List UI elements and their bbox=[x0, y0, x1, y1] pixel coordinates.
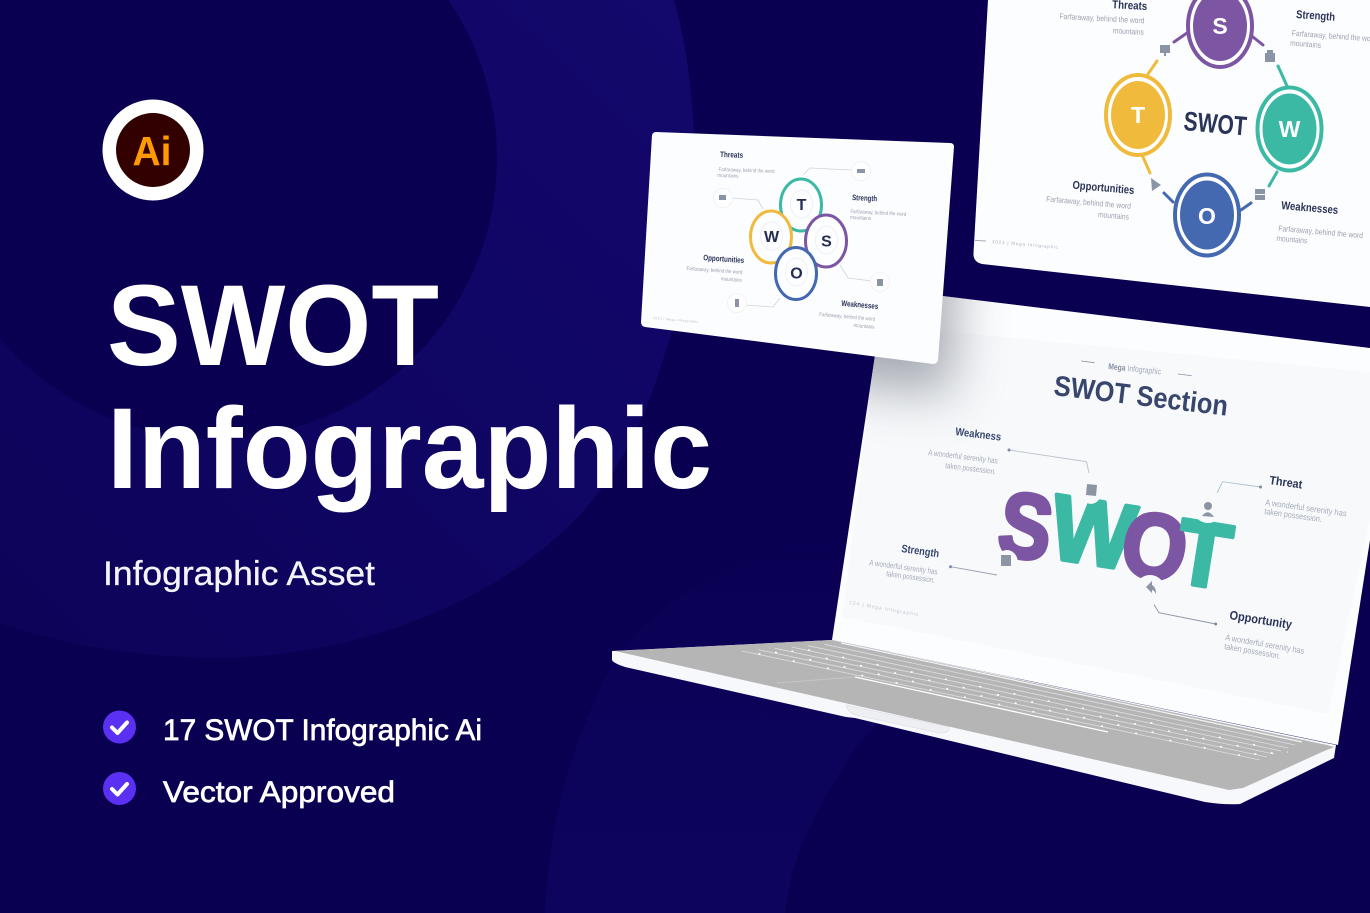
big SWOT letters bbox=[992, 473, 1238, 610]
label: Threats: mountains bbox=[717, 173, 739, 180]
label: Strength bbox=[1290, 9, 1370, 54]
label: Opportunities: mountains bbox=[1098, 210, 1129, 222]
label: Strength bbox=[850, 193, 907, 224]
label: Threat bbox=[1264, 473, 1347, 524]
center label SWOT: SWOT bbox=[1182, 106, 1248, 142]
label: Opportunity: Opportunity bbox=[1229, 608, 1293, 632]
label: Opportunities: mountains bbox=[721, 276, 742, 284]
label: Strength bbox=[869, 543, 940, 585]
icon glyphs bbox=[719, 169, 883, 307]
label: Strength: Strength bbox=[852, 193, 877, 203]
big SWOT letters: T bbox=[1169, 500, 1238, 610]
circle S: S bbox=[1212, 13, 1228, 39]
cycle icons bbox=[1151, 45, 1275, 200]
slide footer: 2023 | Mega Infographic bbox=[653, 316, 699, 324]
label: Weakness: Weakness bbox=[955, 426, 1002, 444]
circle O: O bbox=[790, 266, 803, 282]
circle O bbox=[1175, 174, 1239, 256]
label: Strength: mountains bbox=[850, 215, 871, 222]
feature list bbox=[103, 710, 482, 809]
label: Opportunities: Opportunities bbox=[1072, 180, 1135, 197]
circle S bbox=[806, 215, 846, 267]
big SWOT letters: S bbox=[992, 473, 1059, 582]
label: Threat: Threat bbox=[1269, 473, 1303, 492]
label: Threats: Threats bbox=[720, 150, 744, 160]
circle O: O bbox=[1198, 203, 1216, 229]
label: Threats bbox=[717, 150, 775, 181]
circle W: W bbox=[764, 229, 780, 246]
slide: overlapping SWOT circles bbox=[641, 132, 954, 364]
connectors bbox=[950, 450, 1260, 624]
big SWOT letters: W bbox=[1043, 475, 1142, 590]
label: Weakness: A wonderful serenity has bbox=[928, 448, 998, 466]
title: SWOT bbox=[107, 262, 439, 390]
label: Weaknesses: Weaknesses bbox=[1281, 200, 1339, 217]
label: Weaknesses bbox=[1276, 200, 1365, 250]
letter notches bbox=[996, 476, 1223, 605]
circle T bbox=[780, 179, 822, 231]
slide footer: 2023 | Mega Infographic bbox=[992, 239, 1059, 250]
slide: circular SWOT cycle (top right) bbox=[973, 0, 1370, 307]
label: Opportunity: A wonderful serenity has bbox=[1225, 632, 1305, 656]
label: Weaknesses bbox=[818, 297, 879, 331]
title bbox=[107, 262, 712, 513]
label: Opportunities: Farfaraway, behind the word bbox=[1046, 194, 1131, 211]
label: Threat: taken possession. bbox=[1264, 506, 1323, 524]
label: Weaknesses: mountains bbox=[853, 323, 875, 331]
circle T: T bbox=[1131, 102, 1145, 128]
small slide shadow on screen bbox=[866, 296, 988, 422]
big SWOT letters: O bbox=[1115, 491, 1195, 602]
circle T: T bbox=[797, 197, 807, 214]
laptop base lip bbox=[612, 640, 1336, 804]
circle W bbox=[1258, 88, 1322, 170]
label: Opportunities bbox=[686, 252, 745, 284]
label: Threats: Farfaraway, behind the word bbox=[1059, 12, 1145, 25]
label: Strength: A wonderful serenity has bbox=[869, 558, 938, 577]
screen eyebrow: Mega Infographic bbox=[1108, 361, 1162, 377]
screen footer: 124 | Mega Infographic bbox=[849, 600, 919, 618]
screen eyebrow bbox=[1081, 361, 1192, 377]
label: Weaknesses: mountains bbox=[1276, 234, 1308, 245]
keyboard key dots bbox=[758, 650, 1288, 761]
circle W: W bbox=[1279, 116, 1301, 142]
thumb notch bbox=[846, 705, 949, 733]
laptop bbox=[612, 296, 1370, 804]
circle W bbox=[750, 211, 792, 263]
label: Threats bbox=[1059, 0, 1147, 37]
subtitle: Infographic Asset bbox=[103, 555, 376, 593]
keyboard rows bbox=[742, 643, 1302, 760]
label: Strength: mountains bbox=[1290, 39, 1321, 50]
label: Threats: mountains bbox=[1113, 26, 1144, 37]
label: Strength: Farfaraway, behind the word bbox=[850, 209, 906, 218]
icon bubbles bbox=[714, 162, 890, 312]
label: Strength: Strength bbox=[901, 543, 940, 560]
logo: Adobe Illustrator badge bbox=[102, 100, 204, 200]
label: Threats: Farfaraway, behind the word bbox=[718, 167, 775, 175]
logo: Adobe Illustrator badge: Ai bbox=[132, 128, 172, 174]
label: Weaknesses: Farfaraway, behind the word bbox=[819, 312, 875, 323]
screen heading: SWOT Section bbox=[1052, 370, 1230, 423]
circle S: S bbox=[821, 234, 832, 250]
label: Opportunities: Farfaraway, behind the word bbox=[686, 266, 743, 276]
label: Opportunity: taken possession. bbox=[1224, 641, 1282, 661]
screen panel bbox=[842, 325, 1370, 714]
label: Strength: Strength bbox=[1296, 9, 1335, 24]
laptop deck bbox=[615, 640, 1334, 790]
label: Weakness bbox=[928, 426, 1002, 476]
connector dots bbox=[949, 448, 1262, 626]
label: Opportunities: Opportunities bbox=[703, 253, 745, 265]
label: Opportunities bbox=[1045, 178, 1135, 222]
cycle connectors bbox=[1143, 33, 1287, 210]
trackpad outline bbox=[777, 677, 1108, 732]
circle T bbox=[1106, 75, 1170, 155]
label: Weaknesses: Weaknesses bbox=[841, 299, 879, 311]
label: Weakness: taken possession. bbox=[945, 461, 996, 476]
title: Infographic bbox=[107, 385, 712, 513]
label: Opportunity bbox=[1224, 608, 1305, 661]
label: Threat: A wonderful serenity has bbox=[1265, 497, 1347, 518]
circle O bbox=[776, 248, 816, 300]
letter icons bbox=[1001, 484, 1214, 594]
feature: Vector Approved: Vector Approved bbox=[163, 776, 395, 809]
feature: Vector Approved bbox=[103, 772, 395, 809]
connectors bbox=[732, 168, 872, 307]
label: Strength: taken possession. bbox=[886, 569, 935, 585]
circle S bbox=[1188, 0, 1252, 67]
feature: 17 SWOT Infographic Ai: 17 SWOT Infographic Ai bbox=[163, 714, 482, 747]
laptop screen bbox=[832, 289, 1370, 745]
